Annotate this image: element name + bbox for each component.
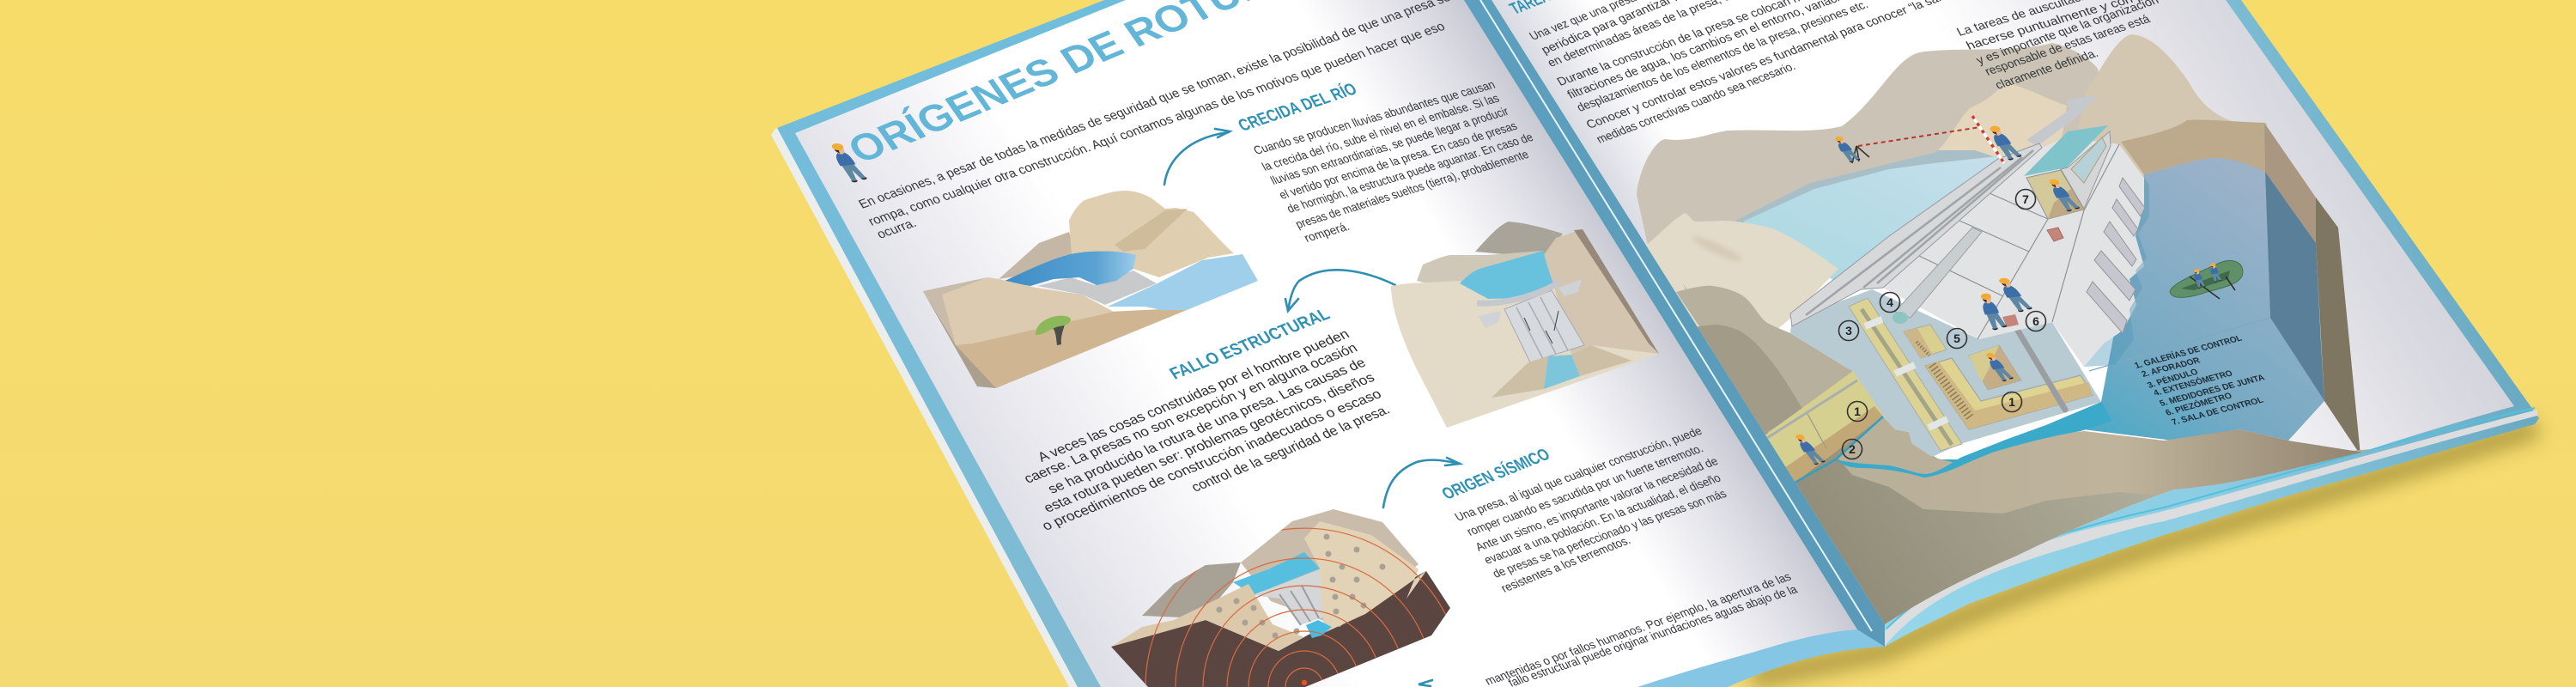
text block: crecida <box>1251 77 1535 245</box>
text block: origen: Ante un sismo, es importante valorar la necesidad de <box>1473 454 1721 554</box>
hill shadow <box>1693 237 1741 261</box>
back hill <box>999 232 1082 279</box>
left hill <box>942 277 1114 345</box>
road <box>2026 96 2098 146</box>
legend <box>2132 332 2267 428</box>
inspection chamber <box>1969 345 2021 390</box>
arrow: to crecida <box>1164 129 1230 185</box>
text block: responsabilidad <box>1954 0 2191 92</box>
roof <box>2024 125 2108 176</box>
passenger <box>2208 263 2222 283</box>
text block: fallo: o procedimientos de construcción inadecuados o escaso <box>1039 386 1384 533</box>
dam <box>1253 569 1327 625</box>
gallery floor <box>1925 362 2093 429</box>
text block: tareas: medidas correctivas cuando sea necesario. <box>1594 59 1798 146</box>
inflatable boat <box>2170 260 2243 299</box>
worker: right <box>1996 277 2033 313</box>
left page paper edge <box>771 0 1142 687</box>
reservoir <box>1233 552 1320 595</box>
sloped gallery <box>1893 228 1982 324</box>
reservoir <box>1460 251 1554 299</box>
legend: 6. PIEZÓMETRO <box>2163 390 2234 418</box>
tripod <box>1852 146 1869 163</box>
cracks <box>1524 311 1558 344</box>
arrow: to fallo <box>1285 270 1395 311</box>
room 5 <box>1904 325 1947 358</box>
gallery section <box>1790 289 2101 457</box>
legend: 5. MEDIDORES DE JUNTA <box>2158 373 2267 409</box>
text block: fallos humanos: fallo estructural puede originar inundaciones aguas abajo de la <box>1505 582 1800 687</box>
callout 2 <box>1843 440 1862 459</box>
ground <box>1683 283 2370 624</box>
callout 1 left: 1 <box>1854 404 1861 418</box>
overflow water <box>1003 251 1136 286</box>
crest grooves <box>1806 150 2033 315</box>
right cliff <box>1543 229 1659 355</box>
callout 3 <box>1839 321 1858 340</box>
dam face lines <box>1919 144 2119 339</box>
dam scallops <box>2084 178 2149 367</box>
house side <box>2061 131 2111 209</box>
windows <box>2071 137 2106 183</box>
illustration: earthquake block <box>1111 509 1463 687</box>
room 5 ladder <box>1917 342 1929 356</box>
callout 1 left <box>1848 402 1867 421</box>
soil under dam <box>1838 416 2370 514</box>
text block: origen <box>1452 424 1728 595</box>
water floor line <box>2089 318 2270 371</box>
illustration: auscultación de presa <box>1637 34 2404 653</box>
survey staff <box>1972 116 2004 163</box>
tunnel pipe <box>1767 380 1857 438</box>
left page blue border <box>777 0 1863 687</box>
callout 6: 6 <box>2032 314 2039 328</box>
callout 5 <box>1947 328 1966 349</box>
middle peak <box>1938 83 2067 159</box>
right page <box>1492 0 2539 647</box>
callout 4: 4 <box>1886 295 1893 309</box>
gallery ladder <box>1932 365 1971 418</box>
anchor caps <box>1865 319 1947 428</box>
right page sheet <box>1492 0 2514 624</box>
arrow: bottom <box>1419 680 1432 686</box>
dam wall <box>1037 271 1157 305</box>
river <box>1306 620 1332 638</box>
text block: responsabilidad: claramente definida. <box>1992 46 2100 92</box>
grey back mountain <box>1475 222 1563 258</box>
text block: crecida: presas de materiales sueltos (tierra), probablemente <box>1293 148 1531 231</box>
drum <box>2047 228 2063 241</box>
downstream water <box>1942 158 2324 462</box>
dark hill <box>1697 325 1801 434</box>
text block: origen: de presas se ha perfeccionado y las presas son más <box>1490 487 1728 581</box>
text block: crecida: de hormigón, la estructura puede aguantar. En caso de <box>1285 131 1535 216</box>
left terrain <box>1111 584 1304 651</box>
lake <box>1743 155 2006 280</box>
buttress panels <box>2087 178 2145 333</box>
boat interior <box>2181 271 2230 290</box>
text block: crecida: romperá. <box>1302 219 1352 245</box>
room floor <box>2048 189 2084 219</box>
text block: fallo: control de la seguridad de la presa. <box>1188 402 1393 495</box>
left page <box>771 0 1885 687</box>
callout 7: 7 <box>2022 192 2029 206</box>
seismic rings <box>1145 528 1463 687</box>
left cover bottom <box>1637 620 1885 687</box>
left page sheet <box>795 0 1857 687</box>
right cover band <box>1885 0 2539 647</box>
legend: 4. EXTENSÓMETRO <box>2151 368 2234 398</box>
gallery end cap <box>1893 312 1908 324</box>
text block: crecida: el vertido por encima de la presa. En caso de presas <box>1277 119 1519 202</box>
grey hill <box>1417 251 1543 292</box>
text block: origen: evacuar a una población. En la actualidad, el diseño <box>1481 471 1723 567</box>
spine band <box>1464 0 1885 647</box>
legend: 2. AFORADOR <box>2140 356 2202 380</box>
callout 5: 5 <box>1953 331 1960 345</box>
staff marks <box>1972 116 2004 163</box>
mid hill <box>1676 286 1883 435</box>
tunnel floor <box>1784 406 1883 483</box>
broken abutments <box>1479 279 1582 328</box>
control room <box>2024 125 2111 219</box>
survey sight line <box>1858 127 1980 146</box>
dam bricks <box>1516 297 1568 359</box>
spine white fold <box>1480 0 1872 631</box>
drain line <box>1795 416 1883 483</box>
worker: left <box>1978 292 2008 331</box>
text block: origen: Una presa, al igual que cualquier construcción, puede <box>1452 424 1704 524</box>
water side wall <box>2265 172 2324 401</box>
illustration: dam overtopping <box>923 191 1258 388</box>
magazine shadow <box>1752 428 2537 678</box>
dam body <box>1504 290 1584 362</box>
legend: 1. GALERÍAS DE CONTROL <box>2132 332 2244 371</box>
text block: fallos humanos: mantenidas o por fallos humanos. Por ejemplo, la apertura de las <box>1482 569 1794 687</box>
river <box>1544 355 1580 389</box>
worker: chamber <box>1983 352 2014 382</box>
callout 2: 2 <box>1849 442 1856 456</box>
right page cyan line <box>1886 408 2535 629</box>
tree <box>1036 316 1071 345</box>
cliff side <box>1574 229 1659 354</box>
callout 4 <box>1880 292 1899 313</box>
illustration: cracked dam <box>1391 222 1659 428</box>
text block: fallo: A veces las cosas construidas por el hombre pueden <box>1035 326 1352 465</box>
callout 1 right: 1 <box>2008 395 2015 409</box>
callout 7 <box>2016 189 2035 210</box>
tan slope <box>2121 120 2265 174</box>
bedrock <box>1111 571 1450 687</box>
room wall <box>2026 170 2084 219</box>
text block: fallo: se ha producido la rotura de una presa. Las causas de <box>1045 356 1369 496</box>
bucket <box>2002 314 2019 327</box>
worker: crest <box>1986 125 2023 161</box>
mountain ridge <box>1115 209 1188 252</box>
heading: fallo estructural: FALLO ESTRUCTURAL <box>1166 306 1334 383</box>
olive side strip <box>2316 198 2360 455</box>
boat paddle <box>2190 277 2235 299</box>
block side <box>923 291 996 388</box>
L-shaped gallery <box>1925 358 2093 429</box>
callout 3: 3 <box>1845 324 1852 337</box>
room 5 floor <box>1904 328 1932 358</box>
worker: surveyor <box>1832 136 1862 163</box>
lower terrain <box>1492 345 1631 398</box>
right mountain <box>2093 34 2267 177</box>
page block bottom <box>1885 410 2537 646</box>
tunnel joint <box>1807 414 1826 448</box>
near left hill <box>1645 213 1838 361</box>
crest <box>1790 143 2042 326</box>
right water <box>1108 254 1258 310</box>
text block: responsabilidad: responsable de estas tareas está <box>1982 12 2153 78</box>
pendulum wire <box>1862 309 1952 445</box>
right mountains <box>1069 191 1234 277</box>
worker: control room <box>2045 178 2081 212</box>
lake shore <box>1735 150 2014 225</box>
text block: origen: resistentes a los terremotos. <box>1498 533 1633 595</box>
text block: crecida: lluvias son extraordinarias, se puede llegar a producir <box>1268 104 1511 187</box>
ground <box>956 309 1187 388</box>
tan side <box>2264 123 2316 243</box>
rock dents <box>1216 534 1386 639</box>
dam columns <box>1279 586 1319 625</box>
intro text: ocurra. <box>874 216 920 241</box>
grey back <box>1142 562 1241 618</box>
legend: 7. SALA DE CONTROL <box>2170 396 2265 428</box>
text block: crecida: la crecida del río, sube el nivel en el embalse. Si las <box>1260 91 1502 173</box>
text block: crecida: Cuando se producen lluvias abundantes que causan <box>1251 77 1498 157</box>
block upper side <box>923 277 999 345</box>
pendulum shaft <box>1849 298 1962 451</box>
arrow: to origen <box>1383 458 1460 508</box>
rower <box>2192 269 2206 289</box>
back mountains <box>1637 43 2112 249</box>
chamber wall <box>1969 345 1999 382</box>
text block: fallo: esta rotura pueden ser: problemas geotécnicos, diseños <box>1041 370 1377 515</box>
heading: crecida del río: CRECIDA DEL RÍO <box>1235 79 1360 135</box>
callout 6 <box>2026 311 2045 331</box>
dam crest <box>1477 282 1560 303</box>
numbered callouts <box>1839 189 2045 459</box>
tunnel <box>1765 371 1883 483</box>
legend: 3. PÉNDULO <box>2145 366 2200 391</box>
text block: origen: romper cuando es sacudida por un fuerte terremoto. <box>1464 441 1705 538</box>
callout 1 right <box>2002 392 2021 412</box>
cream terrain <box>1391 281 1659 428</box>
right terrain <box>1304 521 1426 633</box>
seepage river <box>1836 402 2112 477</box>
epicentre <box>1302 680 1307 685</box>
tan back <box>1241 509 1419 627</box>
text block: fallo: caerse. La presas no son excepción y en alguna ocasión <box>1021 340 1360 486</box>
dam face <box>1883 137 2144 367</box>
piezometer pipe <box>2018 331 2065 410</box>
intro text: rompa, como cualquier otra construcción. Aquí contamos algunas de los motivos que pueden hacer que eso <box>866 20 1448 228</box>
icon: worker holding title <box>828 143 868 183</box>
worker: gallery <box>1792 434 1826 465</box>
text block: fallo <box>1021 326 1393 533</box>
heading: origen sísmico: ORIGEN SÍSMICO <box>1438 445 1553 503</box>
